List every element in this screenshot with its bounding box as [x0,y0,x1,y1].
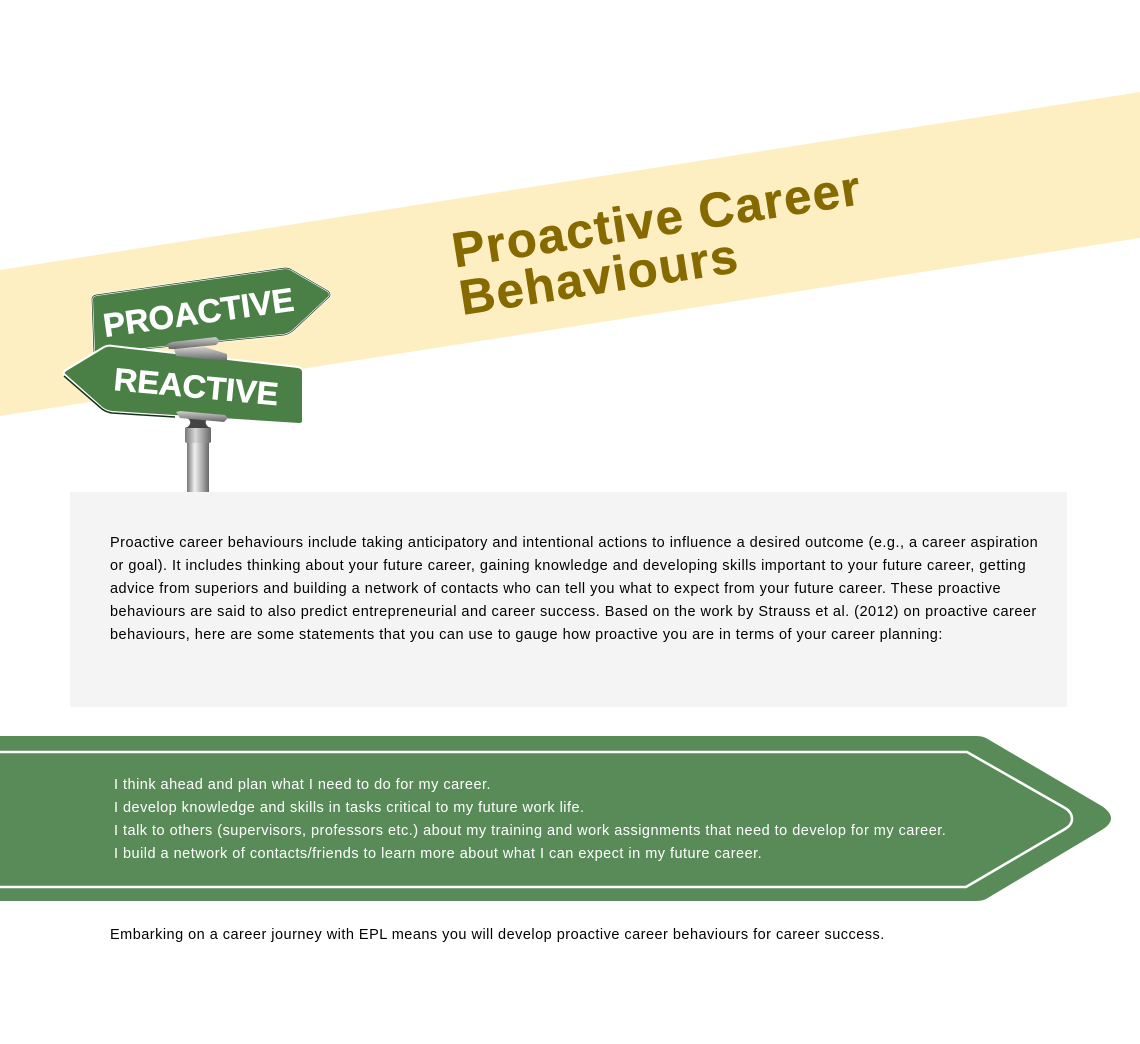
title: Behaviours [456,229,743,326]
intro paragraph: behaviours, here are some statements that you can use to gauge how proactive you are in terms of your career planning: [110,627,943,643]
icon: proactive reactive signpost: PROACTIVE [101,281,296,344]
statements list: I think ahead and plan what I need to do for my career. [114,777,491,793]
closing sentence: Embarking on a career journey with EPL means you will develop proactive career behaviours for career success. [110,927,885,943]
intro paragraph [110,535,1038,643]
intro paragraph: advice from superiors and building a network of contacts who can tell you what to expect from your future career. These proactive [110,581,1001,597]
statements list: I build a network of contacts/friends to learn more about what I can expect in my future career. [114,846,762,862]
statements list: I develop knowledge and skills in tasks critical to my future work life. [114,800,585,816]
intro paragraph: Proactive career behaviours include taking anticipatory and intentional actions to influence a desired outcome (e.g., a career aspiration [110,535,1038,551]
icon: proactive reactive signpost: REACTIVE [112,361,280,412]
intro paragraph: or goal). It includes thinking about your future career, gaining knowledge and developing skills important to your future career, getting [110,558,1026,574]
panel: intro text box [70,492,1067,707]
intro paragraph: behaviours are said to also predict entrepreneurial and career success. Based on the work by Strauss et al. (2012) on proactive career [110,604,1037,620]
statements list [114,777,946,862]
statements list: I talk to others (supervisors, professors etc.) about my training and work assignments that need to develop for my career. [114,823,946,839]
title: Proactive Career [448,161,865,278]
